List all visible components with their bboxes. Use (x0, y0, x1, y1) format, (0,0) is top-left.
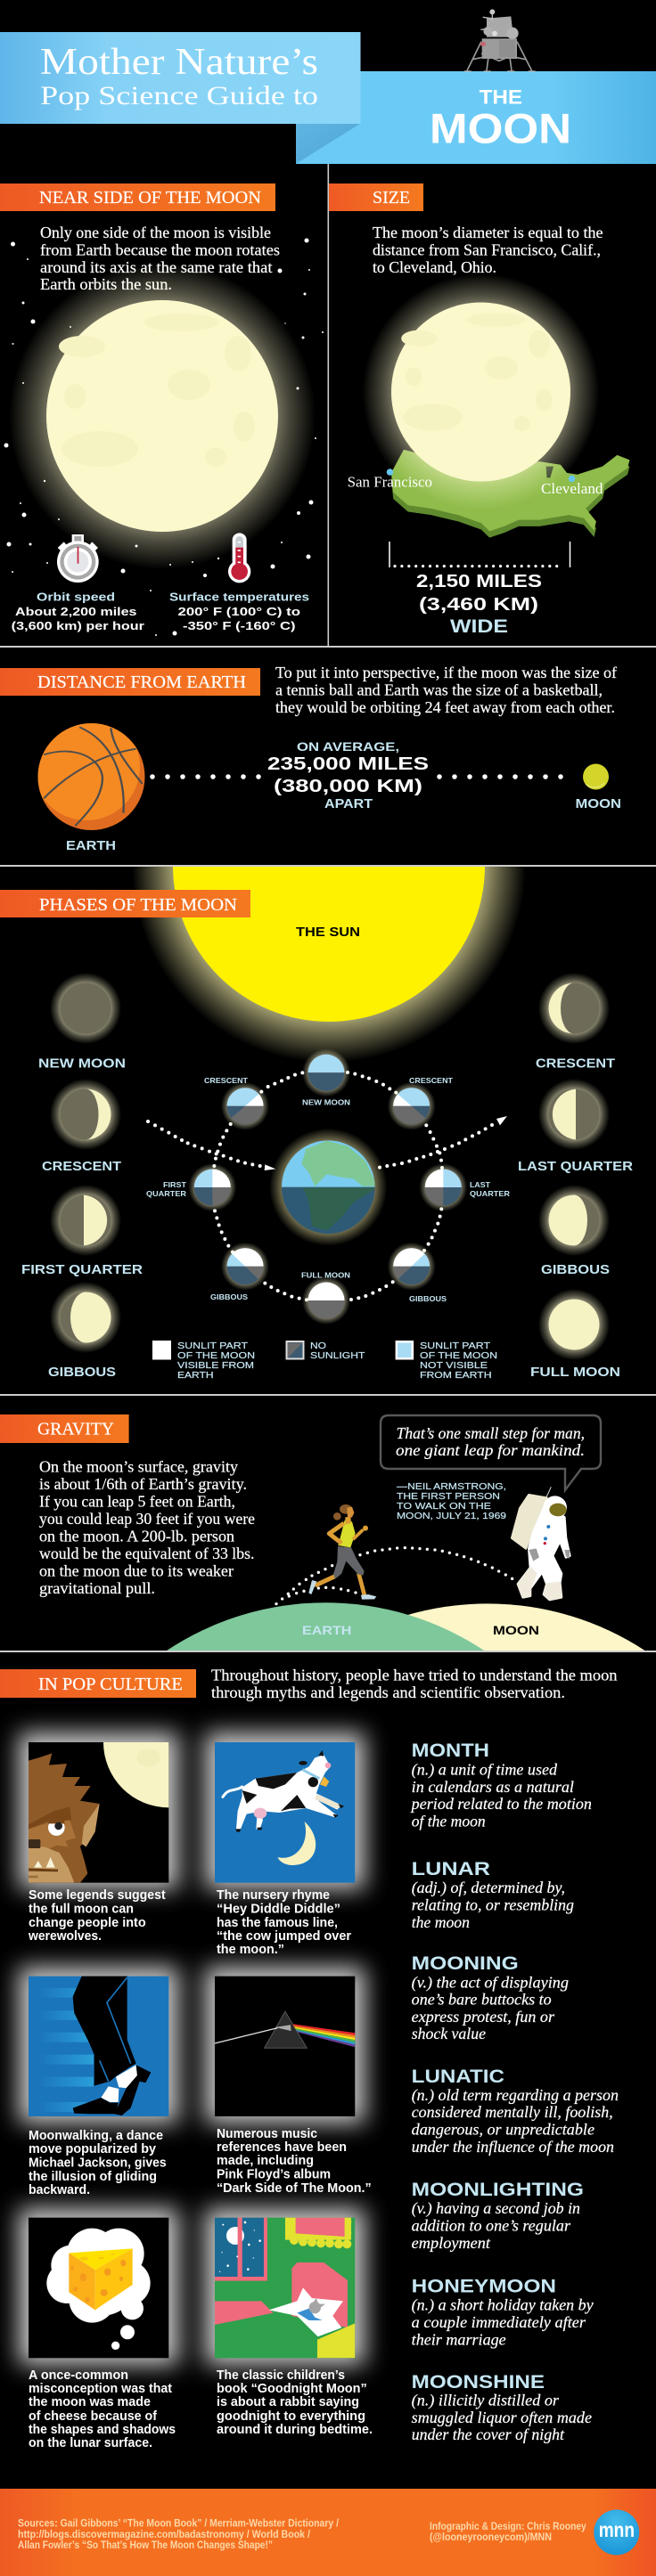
panel: near side of the moon (0, 183, 324, 636)
definition: month (410, 1740, 592, 1830)
text: distance figure: APART (324, 796, 373, 811)
text: near side description: Only one side of the moon is visible (40, 224, 271, 241)
sun (134, 867, 524, 1060)
legend: no sunlight (287, 1341, 365, 1361)
caption: moonwalk: backward. (29, 2183, 90, 2197)
definition: honeymoon: their marriage (412, 2331, 506, 2349)
label: gibbous right: GIBBOUS (541, 1263, 610, 1277)
legend: no sunlight: SUNLIGHT (310, 1350, 365, 1361)
phase: waning gibbous (538, 1185, 610, 1256)
stars (4, 239, 324, 636)
text: gravity description: If you can leap 5 feet on Earth, (39, 1493, 235, 1511)
definition: honeymoon: a couple immediately after (412, 2313, 586, 2331)
text: size description (373, 224, 603, 276)
definition: month: of the moon (412, 1813, 486, 1830)
text: orbit speed (12, 591, 144, 632)
heading bar: near side (0, 183, 275, 211)
text: near side description: around its axis at the same rate that (40, 258, 273, 276)
tile: werewolf (29, 1742, 169, 1883)
text: attribution (397, 1481, 506, 1521)
definition: lunatic: (n.) old term regarding a person (412, 2086, 619, 2105)
title: The: THE (480, 86, 522, 109)
banner: title ribbon (0, 32, 360, 124)
caption: Goodnight Moon: book “Goodnight Moon” (217, 2382, 367, 2396)
caption: cheese: the shapes and shadows (29, 2423, 176, 2437)
legend: sunlit not visible: FROM EARTH (420, 1370, 492, 1381)
divider line (0, 1394, 656, 1396)
panel: distance from Earth (0, 664, 621, 853)
label: last quarter: LAST QUARTER (518, 1160, 634, 1174)
label: moon: MOON (576, 796, 621, 811)
legend: sunlit not visible: OF THE MOON (420, 1350, 497, 1361)
definition: mooning: (v.) the act of displaying (412, 1973, 569, 1992)
caption: cow: “the cow jumped over (217, 1929, 351, 1944)
marker: Cleveland: Cleveland (541, 480, 603, 497)
panel: gravity (0, 1414, 646, 1651)
label: Earth: EARTH (66, 838, 116, 853)
text: distance perspective: a tennis ball and Earth was the size of a basketball, (275, 681, 603, 698)
caption: werewolf: the full moon can (29, 1903, 134, 1917)
orbit moon: last quarter (419, 1163, 467, 1211)
caption: werewolf: werewolves. (28, 1929, 102, 1944)
Earth center (269, 1129, 387, 1246)
orbit moon: new moon (302, 1048, 350, 1096)
icon: stopwatch (57, 534, 99, 583)
jump trajectories (275, 1546, 513, 1605)
definition: month: MONTH (412, 1740, 489, 1761)
phase: last quarter (538, 1079, 610, 1150)
logo: mnn: mnn (599, 2518, 635, 2541)
orbit labels: GIBBOUS (409, 1294, 447, 1303)
text: gravity description: you could leap 30 feet if you were (39, 1510, 255, 1528)
text: distance perspective: they would be orbiting 24 feet away from each other. (275, 698, 615, 716)
orbit labels: LAST (470, 1180, 491, 1189)
caption: cheese: misconception was that (29, 2382, 172, 2396)
phase: full moon (538, 1289, 610, 1360)
phase: new moon (50, 973, 121, 1044)
definition: moonshine: under the cover of night (412, 2425, 565, 2443)
legend: sunlit visible: EARTH (177, 1370, 214, 1381)
text: orbit speed: Orbit speed (37, 591, 115, 604)
tile glows (19, 1732, 365, 2365)
caption: cheese: the moon was made (29, 2395, 151, 2409)
caption: cheese: A once-common (29, 2368, 128, 2383)
text: gravity description: gravitational pull. (39, 1579, 155, 1597)
text: gravity description: is about 1/6th of Earth’s gravity. (39, 1475, 247, 1493)
label: new moon: NEW MOON (38, 1056, 126, 1071)
orbit labels: NEW MOON (302, 1097, 350, 1106)
icon: basketball Earth (37, 723, 144, 830)
ribbon fold shadow (296, 124, 360, 164)
panel: in pop culture (0, 1667, 619, 2450)
text: distance perspective (275, 664, 617, 716)
tile: cow jumping over the moon (215, 1742, 355, 1883)
header banner (0, 32, 656, 164)
footer (0, 2489, 656, 2576)
panel: size (329, 183, 629, 637)
orbit labels (146, 1076, 510, 1303)
legend: sunlit not visible: SUNLIT PART (420, 1341, 491, 1351)
definition: month: in calendars as a natural (412, 1778, 574, 1796)
speech bubble: That’s one small step for man, (397, 1424, 585, 1442)
text: sources (18, 2517, 340, 2551)
text: near side description: from Earth because the moon rotates (40, 240, 280, 258)
definition: honeymoon: (n.) a short holiday taken by (412, 2296, 594, 2315)
definition: mooning: express protest, fun or (412, 2008, 555, 2026)
definition: moonlighting: MOONLIGHTING (412, 2179, 584, 2200)
orbit labels: FIRST (163, 1180, 187, 1189)
heading bar: phases (0, 890, 250, 917)
heading bar: size: SIZE (373, 188, 410, 208)
caption: music references: references have been (217, 2140, 347, 2155)
divider line (0, 646, 656, 648)
text: distance figure: ON AVERAGE, (297, 739, 399, 754)
orbit labels: FULL MOON (301, 1271, 350, 1280)
title: Pop Science Guide to: Pop Science Guide to (40, 81, 318, 110)
text: near side description (40, 224, 280, 293)
text: distance figure (267, 739, 429, 811)
text: attribution: TO WALK ON THE (397, 1501, 491, 1512)
panel: phases of the moon (0, 867, 656, 2576)
text: gravity description: would be the equivalent of 33 lbs. (39, 1545, 255, 1562)
orbit moon: crescent left (221, 1083, 269, 1129)
text: width figure: WIDE (450, 616, 508, 637)
caption: cow: The nursery rhyme (217, 1888, 330, 1903)
text: width figure: (3,460 KM) (419, 595, 538, 615)
dotted line: right (439, 774, 576, 779)
caption: moonwalk: Moonwalking, a dance (29, 2129, 163, 2143)
orbit labels: CRESCENT (409, 1076, 454, 1085)
moon: size comparison (362, 273, 599, 510)
dotted line: left (152, 774, 259, 779)
heading bar: pop culture: IN POP CULTURE (38, 1675, 183, 1694)
text: surface temperatures: Surface temperatures (169, 591, 309, 604)
text: sources: Allan Fowler’s “So That’s How The Moon Changes Shape!” (18, 2539, 273, 2551)
caption: Goodnight Moon: goodnight to everything (217, 2409, 365, 2424)
label: crescent: CRESCENT (42, 1160, 121, 1174)
figure: runner (308, 1504, 376, 1600)
legend: sunlit not visible: NOT VISIBLE (420, 1360, 488, 1371)
heading bar: pop culture (0, 1669, 196, 1698)
hill: moon (329, 1603, 646, 1651)
caption: moonwalk: Michael Jackson, gives (29, 2156, 167, 2171)
map: continental United States (391, 450, 629, 538)
orbit moon: first quarter (188, 1163, 236, 1211)
label: Earth hill: EARTH (302, 1623, 351, 1637)
caption: cow: “Hey Diddle Diddle” (217, 1903, 340, 1917)
text: sources: Sources: Gail Gibbons’ “The Moon Book” / Merriam-Webster Dictionary / (18, 2517, 340, 2530)
caption: cow: has the famous line, (217, 1916, 338, 1930)
text: near side description: Earth orbits the sun. (40, 275, 172, 293)
title: Mother Nature's: Mother Nature’s (40, 42, 318, 83)
label: moon hill: MOON (493, 1623, 539, 1637)
caption: moonwalk: move popularized by (29, 2142, 156, 2156)
definition: honeymoon: HONEYMOON (412, 2276, 556, 2297)
text: gravity description: on the moon due to its weaker (39, 1562, 234, 1580)
label: the sun: THE SUN (296, 925, 360, 940)
text: surface temperatures (169, 591, 309, 632)
definition: lunar: the moon (412, 1913, 470, 1931)
caption: werewolf (28, 1888, 166, 1944)
definition: lunar: relating to, or resembling (412, 1896, 574, 1914)
caption: moonwalk (29, 2129, 167, 2197)
caption: music references: Pink Floyd’s album (217, 2168, 331, 2182)
text: distance figure: 235,000 MILES (267, 754, 429, 774)
definition: moonlighting: (v.) having a second job in (412, 2199, 580, 2218)
icon: tennis ball moon (583, 764, 609, 789)
text: size description: to Cleveland, Ohio. (373, 258, 496, 276)
phase: waxing crescent (50, 1079, 121, 1150)
caption: cow: the moon.” (217, 1943, 284, 1957)
text: width figure: 2,150 MILES (416, 572, 542, 591)
text: credits: (@looneyrooneycom)/MNN (430, 2531, 552, 2543)
definition: month: (n.) a unit of time used (412, 1760, 558, 1779)
text: sources: http://blogs.discovermagazine.com/badastronomy / World Book / (18, 2528, 311, 2540)
caption: cheese: of cheese because of (29, 2409, 157, 2424)
legend: sunlit visible: OF THE MOON (177, 1350, 255, 1361)
definition: lunatic: under the influence of the moon (412, 2138, 614, 2156)
text: orbit speed: About 2,200 miles (15, 606, 137, 618)
definition: moonlighting: employment (412, 2234, 491, 2252)
divider line (0, 865, 656, 867)
definition: mooning: MOONING (412, 1952, 519, 1974)
label: crescent right: CRESCENT (536, 1056, 615, 1071)
text: attribution: —NEIL ARMSTRONG, (397, 1481, 506, 1492)
phase: first quarter (50, 1185, 121, 1256)
definition: lunatic (412, 2066, 619, 2156)
phase: waxing gibbous (50, 1282, 121, 1353)
logo: mnn (594, 2510, 639, 2555)
label: first quarter: FIRST QUARTER (21, 1263, 144, 1277)
figure: astronaut (512, 1487, 570, 1600)
caption: music references: “Dark Side of The Moon.” (217, 2181, 372, 2196)
text: credits: Infographic & Design: Chris Rooney (430, 2520, 586, 2532)
definition: lunatic: considered mentally ill, foolish, (412, 2103, 613, 2121)
legend (152, 1341, 497, 1381)
caption: werewolf: Some legends suggest (29, 1888, 166, 1903)
caption: cow (217, 1888, 351, 1957)
text: size description: The moon’s diameter is equal to the (373, 224, 603, 241)
legend: no sunlight: NO (310, 1341, 326, 1351)
caption: Goodnight Moon: The classic children’s (217, 2368, 345, 2383)
heading bar: phases: PHASES OF THE MOON (39, 895, 237, 915)
orbit moon: gibbous left (221, 1243, 269, 1290)
tile: prism (215, 1977, 355, 2116)
heading bar: gravity (0, 1414, 129, 1443)
orbit labels: CRESCENT (204, 1076, 249, 1085)
definition: moonshine (412, 2371, 592, 2443)
text: surface temperatures: 200° F (100° C) to (178, 606, 300, 618)
speech bubble (381, 1415, 601, 1490)
orbit moon: gibbous right (388, 1243, 435, 1290)
legend: sunlit visible: VISIBLE FROM (177, 1360, 254, 1371)
definition: moonshine: MOONSHINE (412, 2371, 545, 2393)
title: Moon: MOON (430, 105, 571, 152)
text: attribution: MOON, JULY 21, 1969 (397, 1511, 506, 1521)
bracket: moon width (390, 542, 570, 567)
legend: sunlit visible: SUNLIT PART (177, 1341, 249, 1351)
definition: mooning (412, 1952, 569, 2042)
definition: lunar: LUNAR (412, 1858, 491, 1879)
caption: Goodnight Moon: around it during bedtime. (217, 2423, 373, 2437)
caption: cheese: on the lunar surface. (29, 2436, 152, 2450)
definition: lunar: (adj.) of, determined by, (412, 1879, 565, 1897)
orbit moon: full moon (302, 1276, 350, 1325)
definition: lunatic: dangerous, or unpredictable (412, 2121, 594, 2139)
caption: music references: made, including (217, 2154, 314, 2168)
heading bar: size (329, 183, 423, 211)
hill: Earth (166, 1602, 486, 1651)
tile: cheese thought bubble (29, 2218, 168, 2358)
caption: Goodnight Moon: is about a rabbit saying (217, 2395, 359, 2409)
caption: werewolf: change people into (29, 1916, 146, 1930)
definition: moonlighting: addition to one’s regular (412, 2217, 571, 2235)
divider: near side / size (328, 164, 329, 647)
orbit dots and arrows (146, 1071, 507, 1301)
divider line (0, 1651, 656, 1652)
text: surface temperatures: -350° F (-160° C) (183, 620, 296, 632)
text: distance figure: (380,000 KM) (274, 777, 422, 796)
orbit moon: crescent right (388, 1083, 435, 1129)
heading bar: distance (0, 668, 260, 696)
definition: lunatic: LUNATIC (412, 2066, 504, 2087)
heading bar: distance: DISTANCE FROM EARTH (37, 673, 246, 692)
caption: Goodnight Moon (217, 2368, 373, 2437)
label: full moon: FULL MOON (530, 1365, 620, 1380)
tile: moonwalk (29, 1977, 168, 2116)
definition: mooning: one’s bare buttocks to (412, 1991, 552, 2009)
caption: moonwalk: the illusion of gliding (29, 2170, 157, 2184)
caption: cheese (29, 2368, 176, 2450)
definition: moonshine: (n.) illicitly distilled or (412, 2392, 560, 2410)
text: distance perspective: To put it into perspective, if the moon was the size of (275, 664, 617, 681)
text: pop culture intro (211, 1667, 618, 1701)
orbit labels: GIBBOUS (210, 1292, 248, 1301)
definition: moonlighting (412, 2179, 584, 2252)
definition: moonshine: smuggled liquor often made (412, 2409, 592, 2426)
text: pop culture intro: through myths and legends and scientific observation. (211, 1683, 565, 1701)
orbit labels: QUARTER (146, 1189, 186, 1198)
legend: sunlit not visible (396, 1341, 497, 1381)
tile: Goodnight Moon bedroom (215, 2218, 355, 2358)
label: gibbous: GIBBOUS (48, 1365, 116, 1380)
icon: lunar lander (464, 9, 536, 71)
definition: mooning: shock value (412, 2025, 486, 2042)
phase: waning crescent (538, 973, 610, 1044)
text: credits (430, 2520, 586, 2543)
marker: San Francisco: San Francisco (348, 474, 432, 490)
text: gravity description: on the moon. A 200-lb. person (39, 1527, 234, 1545)
definition: honeymoon (412, 2276, 594, 2349)
heading bar: near side: NEAR SIDE OF THE MOON (39, 188, 261, 208)
text: pop culture intro: Throughout history, people have tried to understand the moon (211, 1667, 618, 1684)
text: size description: distance from San Francisco, Calif., (373, 240, 601, 258)
legend: sunlit visible (152, 1341, 255, 1381)
orbit labels: QUARTER (470, 1189, 510, 1198)
speech bubble: one giant leap for mankind. (396, 1441, 585, 1459)
moon: near side (9, 263, 316, 569)
text: gravity description (39, 1458, 255, 1597)
text: gravity description: On the moon’s surface, gravity (39, 1458, 238, 1476)
text: attribution: THE FIRST PERSON (397, 1491, 500, 1502)
definition: lunar (412, 1858, 574, 1931)
banner: moon ribbon (296, 71, 656, 164)
caption: music references: Numerous music (217, 2127, 317, 2141)
definition: month: period related to the motion (410, 1795, 592, 1813)
text: width figure (416, 572, 542, 637)
text: orbit speed: (3,600 km) per hour (12, 620, 144, 632)
heading bar: gravity: GRAVITY (37, 1420, 114, 1439)
icon: thermometer (228, 533, 250, 583)
caption: music references (217, 2127, 372, 2196)
